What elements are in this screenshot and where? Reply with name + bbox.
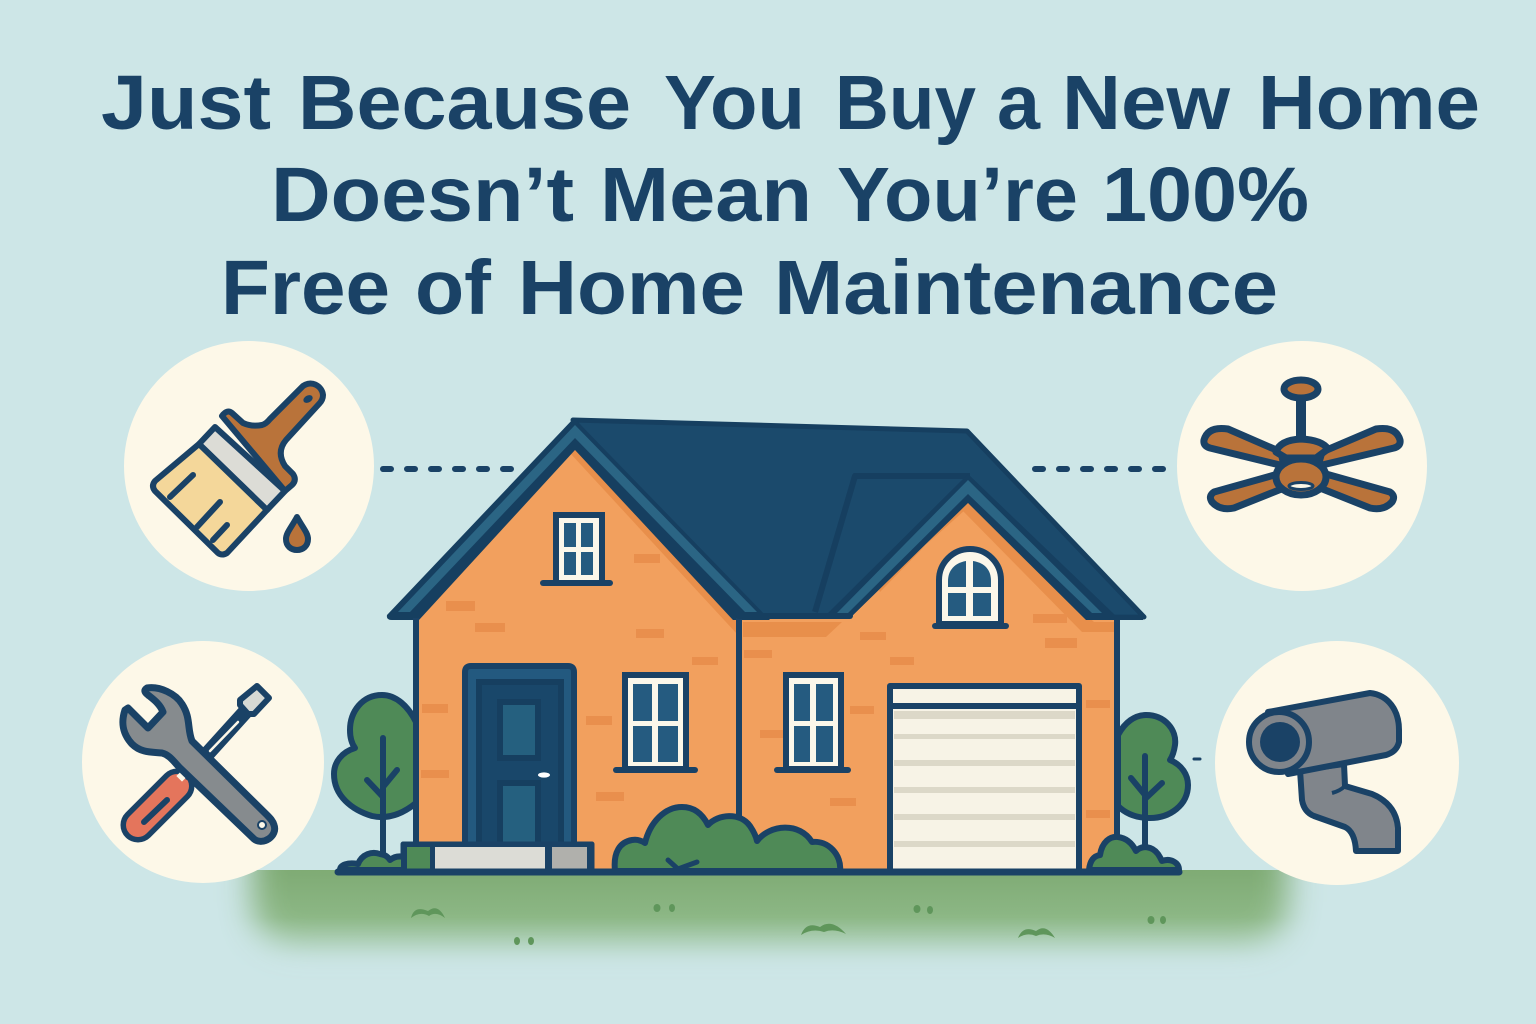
- icon: gutter pipe: [1249, 693, 1399, 851]
- right gable fascia: [825, 474, 1143, 620]
- tree left: [334, 695, 416, 853]
- title: You’re: [837, 152, 1078, 238]
- icon: paint brush: [153, 384, 323, 554]
- title: Free: [221, 245, 390, 331]
- wrench hole: [258, 821, 266, 829]
- title: Doesn’t: [271, 152, 574, 238]
- title: New: [1062, 60, 1231, 146]
- lawn: [229, 870, 1311, 960]
- title: Maintenance: [774, 245, 1278, 331]
- bushes: [340, 807, 1179, 871]
- title: Home: [518, 245, 745, 331]
- panel: gutter downspout icon: [1215, 641, 1459, 885]
- garage door: [890, 686, 1079, 872]
- title: Home: [1258, 60, 1480, 146]
- house: [334, 419, 1188, 872]
- front steps: [403, 844, 592, 872]
- base line of roofs: [739, 613, 850, 619]
- title: of: [415, 245, 491, 331]
- panel: tools icon: [82, 641, 324, 883]
- title: Just: [101, 60, 271, 146]
- title: 100%: [1102, 152, 1309, 238]
- wall left: [416, 448, 739, 872]
- lower left window: [616, 675, 695, 770]
- dashed connector lines: [383, 469, 1200, 759]
- title: [101, 60, 1480, 331]
- title: a: [997, 60, 1041, 146]
- bush twig: [668, 860, 697, 869]
- upper left window: [543, 515, 610, 583]
- left gable fascia: [387, 419, 770, 620]
- title: You: [664, 60, 805, 146]
- icon: screwdriver: [138, 686, 269, 825]
- arched window: [935, 549, 1006, 626]
- dormer outline: [815, 476, 970, 612]
- tree right: [1118, 715, 1188, 850]
- front door: [465, 666, 574, 845]
- panel: paint brush icon: [124, 341, 374, 591]
- panel: ceiling fan icon: [1177, 341, 1427, 591]
- main roof: [573, 420, 1144, 618]
- bricks: [421, 554, 1110, 818]
- title: Buy: [835, 60, 976, 146]
- wall shading under eaves: [570, 448, 1114, 637]
- ground line: [338, 868, 1179, 876]
- icon: wrench: [123, 688, 275, 841]
- title: Mean: [600, 152, 812, 238]
- wall right: [739, 502, 1116, 872]
- icon: ceiling fan: [1204, 380, 1400, 509]
- lower middle window: [777, 675, 848, 770]
- handle hole: [302, 393, 314, 405]
- title: Because: [298, 60, 631, 146]
